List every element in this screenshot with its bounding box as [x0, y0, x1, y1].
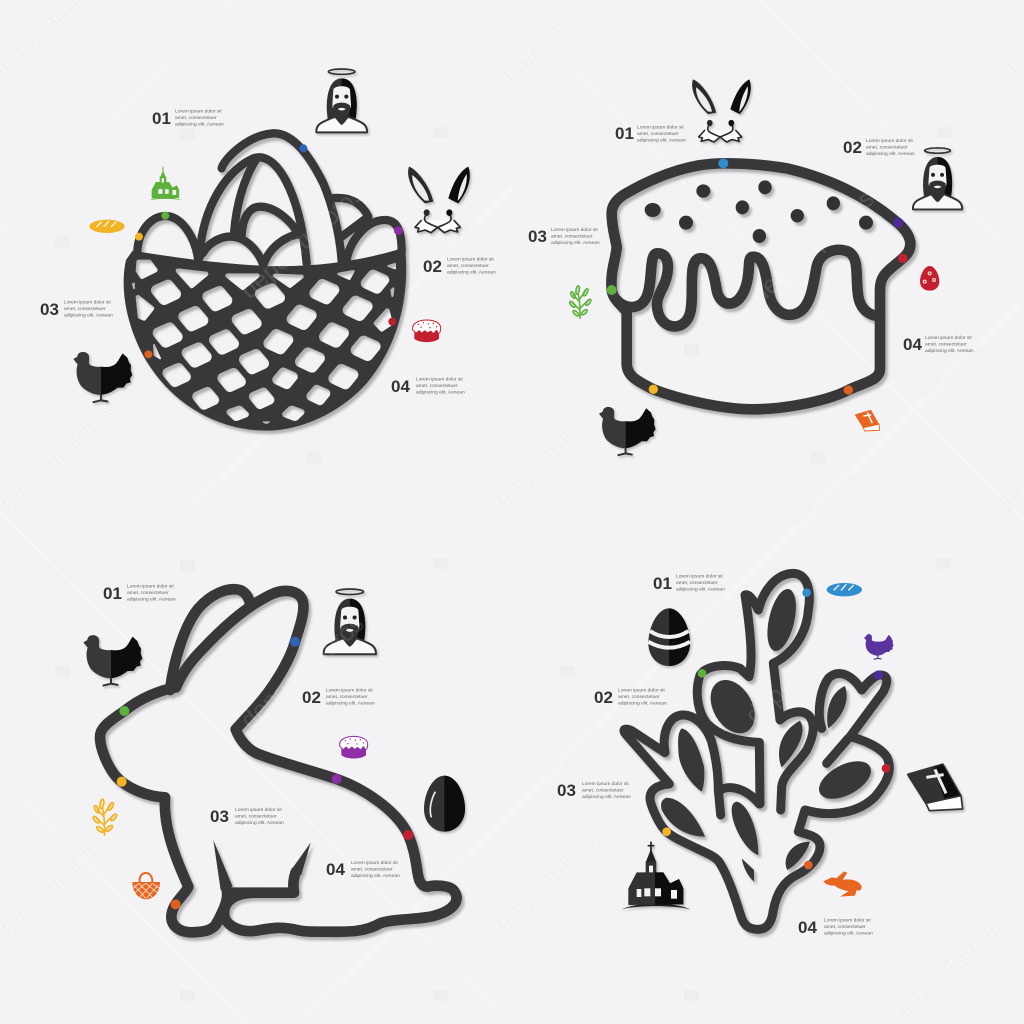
icon: Jesus [316, 69, 367, 132]
icon: orange rabbit [823, 871, 862, 897]
label 02: amet, consectetuer [326, 694, 368, 700]
icon: hen [73, 352, 132, 402]
connector dots [607, 158, 907, 395]
connector dots [117, 637, 413, 909]
label 01: Lorem ipsum dolor sit [637, 124, 684, 130]
label 02: adipiscing elit. Aenean [866, 151, 915, 157]
icon: yellow bread [89, 220, 125, 233]
icon: rabbit head [408, 167, 470, 233]
icon: rabbit head [692, 79, 751, 142]
label 03: 03 [557, 781, 576, 800]
icon: black book [908, 765, 963, 811]
label 01: Lorem ipsum dolor sit [127, 584, 174, 590]
label 04: adipiscing elit. Aenean [824, 930, 873, 936]
label 03: Lorem ipsum dolor sit [551, 227, 598, 233]
icon: Jesus [324, 589, 376, 654]
label 03: amet, consectetuer [582, 788, 624, 794]
label 04: Lorem ipsum dolor sit [416, 376, 463, 382]
label 03: adipiscing elit. Aenean [64, 312, 113, 318]
label 04: Lorem ipsum dolor sit [351, 860, 398, 866]
watermark overlay: depositphotos [740, 604, 875, 729]
label 01: 01 [653, 574, 672, 593]
label 02: amet, consectetuer [866, 144, 908, 150]
label 02: Lorem ipsum dolor sit [447, 256, 494, 262]
label 01: adipiscing elit. Aenean [175, 122, 224, 128]
label 03 [40, 300, 113, 319]
icon: Jesus [913, 148, 962, 209]
label 04: 04 [391, 377, 410, 396]
icon: red cake [413, 320, 441, 342]
label 03: amet, consectetuer [235, 814, 277, 820]
label 02: adipiscing elit. Aenean [447, 270, 496, 276]
watermark pattern: depositphotos [487, 815, 622, 940]
label 01: amet, consectetuer [637, 131, 679, 137]
label 04: amet, consectetuer [824, 924, 866, 930]
label 04: 04 [326, 860, 345, 879]
label 02 [423, 256, 496, 276]
label 03: amet, consectetuer [551, 234, 593, 240]
label 02: amet, consectetuer [447, 263, 489, 269]
icon: hen [83, 635, 142, 686]
label 04 [326, 860, 400, 879]
label 03: amet, consectetuer [64, 306, 106, 312]
panel: cake infographic [528, 79, 974, 455]
label 02: adipiscing elit. Aenean [618, 700, 667, 706]
icon: yellow willow [92, 799, 118, 835]
label 03: adipiscing elit. Aenean [582, 794, 631, 800]
watermark overlay: depositphotos [745, 184, 880, 309]
icon: green willow [569, 285, 592, 318]
label 04 [798, 918, 873, 937]
label 02 [594, 688, 667, 707]
label 01: Lorem ipsum dolor sit [175, 108, 222, 114]
icon: blue bread [827, 583, 862, 596]
label 02: Lorem ipsum dolor sit [618, 688, 665, 694]
label 03: Lorem ipsum dolor sit [582, 781, 629, 787]
watermark overlay [235, 179, 880, 734]
label 03 [210, 807, 284, 826]
label 02: 02 [423, 257, 442, 276]
label 03: adipiscing elit. Aenean [551, 240, 600, 246]
label 02: Lorem ipsum dolor sit [866, 138, 913, 144]
panel: willow infographic [557, 573, 963, 937]
icon: green church [148, 167, 183, 200]
label 01: adipiscing elit. Aenean [637, 138, 686, 144]
label 04: amet, consectetuer [416, 383, 458, 389]
label 04: Lorem ipsum dolor sit [824, 918, 871, 924]
label 04: 04 [903, 335, 922, 354]
label 03 [557, 781, 631, 800]
label 03 [528, 227, 600, 246]
label 04: adipiscing elit. Aenean [416, 390, 465, 396]
label 02 [302, 688, 375, 707]
watermark pattern: depositphotos [487, 391, 622, 516]
panel: rabbit infographic [83, 584, 465, 932]
label 01: adipiscing elit. Aenean [127, 596, 176, 602]
label 02: Lorem ipsum dolor sit [326, 688, 373, 694]
willow figure [624, 573, 889, 929]
icon: purple cake [340, 736, 368, 758]
icon: church [622, 842, 691, 909]
label 04: amet, consectetuer [351, 866, 393, 872]
label 01 [152, 108, 224, 128]
label 01: 01 [615, 124, 634, 143]
label 01: 01 [152, 109, 171, 128]
watermark overlay: depositphotos [235, 179, 370, 304]
icon: orange book [855, 410, 880, 431]
label 03: 03 [528, 227, 547, 246]
connector dots [662, 588, 890, 869]
label 04: adipiscing elit. Aenean [351, 873, 400, 879]
label 01: 01 [103, 584, 122, 603]
label 04: amet, consectetuer [925, 342, 967, 348]
basket figure [124, 133, 406, 431]
panel: basket infographic [40, 69, 496, 431]
icon: hen [599, 407, 656, 455]
cake figure [611, 163, 910, 409]
label 01: adipiscing elit. Aenean [676, 586, 725, 592]
icon: orange basket [132, 873, 160, 899]
label 03: 03 [40, 300, 59, 319]
icon: purple hen [864, 634, 893, 659]
label 01: amet, consectetuer [175, 115, 217, 121]
label 02: 02 [594, 688, 613, 707]
label 02: 02 [843, 138, 862, 157]
label 03: Lorem ipsum dolor sit [64, 300, 111, 306]
label 01: amet, consectetuer [676, 580, 718, 586]
label 01: Lorem ipsum dolor sit [676, 574, 723, 580]
label 01: amet, consectetuer [127, 590, 169, 596]
label 02 [843, 138, 915, 157]
icon: striped egg [648, 608, 690, 666]
watermark pattern: depositphotos [887, 901, 1022, 1024]
label 04: adipiscing elit. Aenean [925, 348, 974, 354]
label 04: Lorem ipsum dolor sit [925, 335, 972, 341]
connector dots [135, 144, 403, 358]
label 03: Lorem ipsum dolor sit [235, 807, 282, 813]
label 03: adipiscing elit. Aenean [235, 820, 284, 826]
label 02: 02 [302, 688, 321, 707]
watermark overlay: depositphotos [235, 609, 370, 734]
rabbit figure [100, 589, 457, 932]
label 01 [615, 124, 686, 144]
label 02: amet, consectetuer [618, 694, 660, 700]
icon: red egg [920, 266, 939, 291]
label 03: 03 [210, 807, 229, 826]
label 02: adipiscing elit. Aenean [326, 700, 375, 706]
label 04: 04 [798, 918, 817, 937]
label 01 [653, 574, 725, 593]
label 01 [103, 584, 176, 603]
label 04 [903, 335, 974, 354]
icon: black egg [424, 776, 465, 832]
label 04 [391, 376, 465, 396]
